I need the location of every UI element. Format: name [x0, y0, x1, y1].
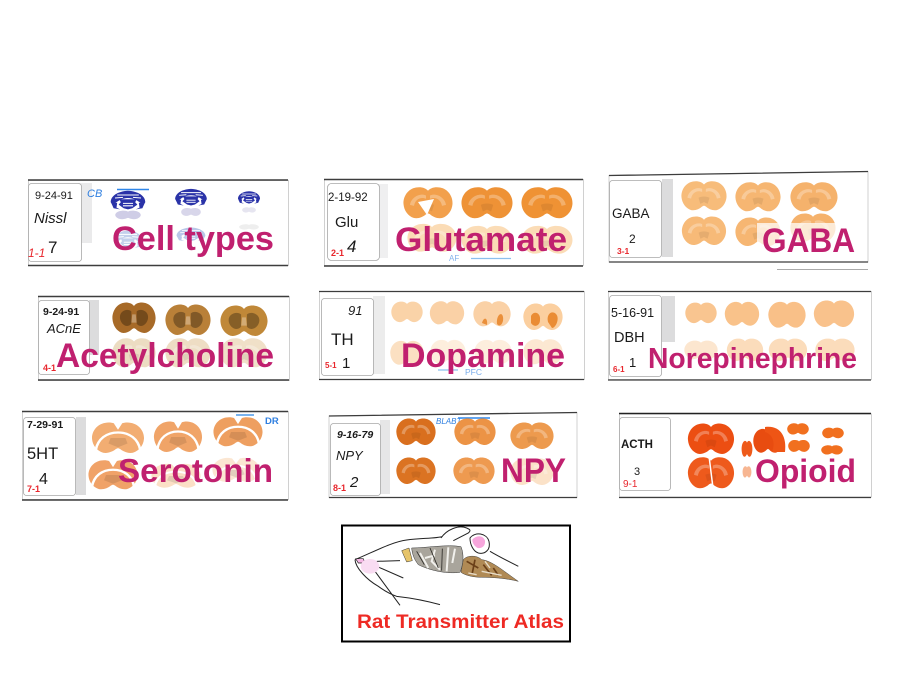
note: AF: AF [449, 254, 459, 263]
slide label [24, 418, 76, 496]
slide label: 1 [342, 355, 350, 372]
slide label [38, 300, 90, 374]
brain sections: Norepinephrine [684, 301, 855, 361]
caption: Rat Transmitter Atlas [357, 612, 564, 633]
heading: Acetylcholine: Acetylcholine [56, 337, 274, 375]
slide label: 1 [629, 355, 636, 370]
slide label: 6-1 [613, 365, 625, 374]
slide label: 3 [634, 466, 640, 478]
note: PFC [438, 367, 482, 377]
slide label: ACnE [46, 321, 81, 336]
note: BLA blue: BLABT [436, 417, 462, 426]
heading: Dopamine: Dopamine [401, 337, 565, 375]
slide: Glutamate [324, 180, 584, 266]
slide label: 8-1 [333, 483, 346, 493]
slide: Cell types [28, 180, 288, 266]
slide label: 4 [347, 237, 356, 256]
brain: olfactory bulb [402, 548, 412, 562]
note: DR: DR [265, 416, 279, 427]
brain sections: GABA [681, 181, 838, 246]
slide label: NPY [336, 448, 364, 463]
slide: Acetylcholine [38, 296, 290, 380]
brain sections: NPY [396, 419, 554, 485]
note: PFC: PFC [465, 367, 482, 377]
brain: hindbrain [461, 556, 518, 581]
slide label: 9-16-79 [337, 429, 373, 441]
slide label: 2 [349, 474, 359, 491]
heading: GABA: GABA [762, 222, 855, 260]
slide label: 4 [39, 471, 48, 488]
slide label: 7 [48, 238, 57, 257]
note: AF [449, 254, 511, 263]
heading: Serotonin: Serotonin [118, 452, 273, 489]
heading: NPY: NPY [501, 452, 566, 490]
slide label: 91 [348, 303, 362, 318]
illustration: rat with brain [355, 527, 518, 605]
brain sections: Glutamate [403, 187, 573, 254]
brain sections: Dopamine [390, 301, 563, 365]
slide: Opioid [619, 414, 872, 498]
note: CB: CB [87, 188, 102, 200]
slide label [328, 184, 380, 260]
brain sections: Opioid [688, 423, 844, 488]
slide label: 2 [629, 232, 636, 246]
slide: Dopamine [319, 292, 584, 380]
heading: Cell types: Cell types [112, 220, 274, 258]
slide label: 2-1 [331, 248, 344, 258]
slide label: DBH [614, 330, 645, 346]
slide label: 9-1 [623, 479, 638, 490]
slide label [330, 424, 380, 496]
note: BLA blue [436, 417, 490, 426]
slide label: 1-1 [28, 246, 45, 260]
slide label: 7-29-91 [27, 419, 63, 431]
slide: Norepinephrine [608, 292, 872, 380]
slide label: Nissl [34, 210, 67, 227]
panel: Rat Transmitter Atlas [342, 526, 570, 642]
slide label [620, 418, 670, 490]
slide label: 3-1 [617, 246, 630, 256]
slide label [322, 298, 374, 376]
slide: GABA [609, 172, 868, 270]
slide: NPY [329, 412, 577, 498]
slide label: 5-1 [325, 361, 337, 370]
slide label: TH [331, 330, 354, 349]
slide label: Glu [335, 214, 358, 231]
slide label: ACTH [621, 439, 653, 451]
slide label: GABA [612, 206, 650, 221]
slide label: 4-1 [43, 363, 56, 373]
note: DR [236, 415, 279, 427]
heading: Norepinephrine: Norepinephrine [648, 343, 857, 375]
slide label: 5-16-91 [611, 306, 654, 320]
heading: Glutamate: Glutamate [395, 221, 567, 259]
brain sections: Nissl [111, 189, 260, 248]
label backing [757, 223, 860, 261]
slide label: 9-24-91 [35, 190, 73, 202]
slide label: 5HT [27, 445, 58, 463]
slide: Serotonin [22, 412, 288, 500]
slide label: 2-19-92 [328, 192, 368, 204]
brain sections: Serotonin [88, 417, 263, 489]
heading: Opioid: Opioid [755, 453, 856, 489]
brain: forebrain [412, 546, 463, 573]
brain sections: Acetylcholine [112, 303, 268, 367]
slide label: 7-1 [27, 484, 40, 494]
slide label [610, 180, 662, 258]
slide label: 9-24-91 [43, 306, 79, 318]
slide label [28, 184, 82, 262]
slide label [610, 296, 662, 376]
